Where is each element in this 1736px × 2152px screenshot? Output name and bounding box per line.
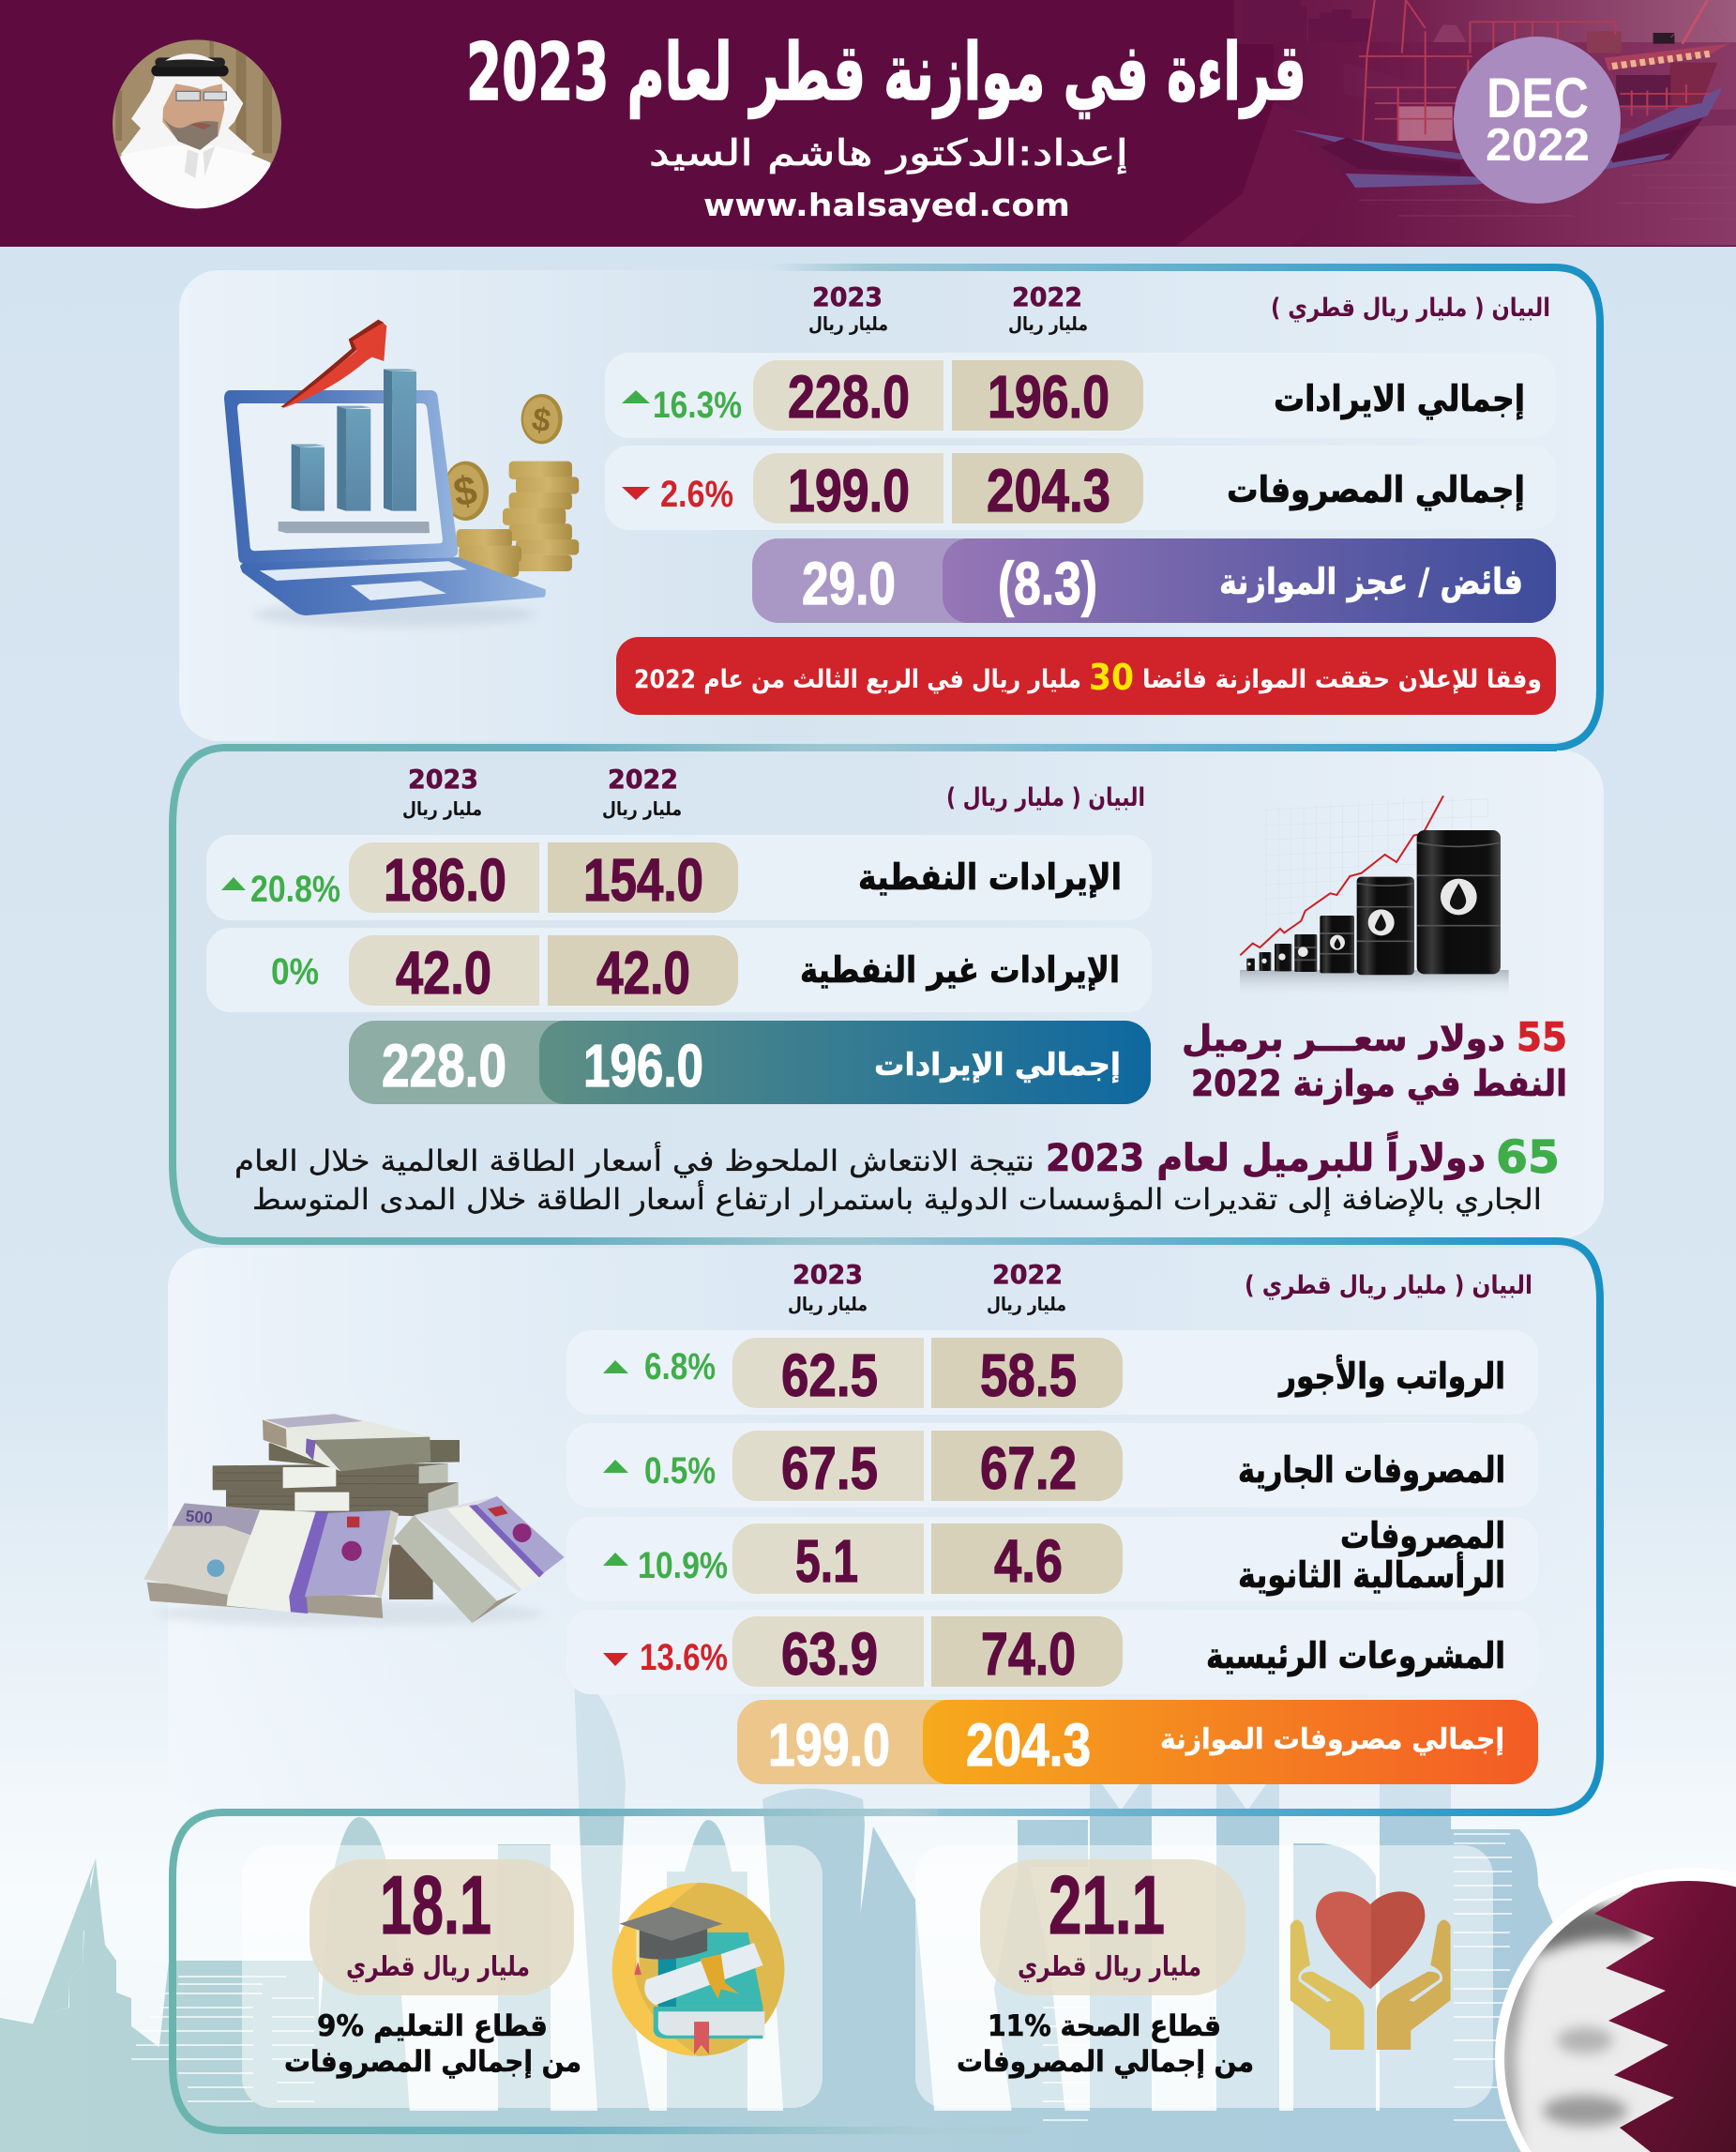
row: total budget expenditure bar: إجمالي مصروفات الموازنة [1160, 1723, 1504, 1756]
column headers: مليار ريال [987, 1293, 1066, 1315]
callout: Q3 surplus note: وفقا للإعلان حققت الموازنة فائضا [1142, 665, 1542, 694]
column headers: 2022 [608, 764, 678, 795]
row: major projects: 63.9 [781, 1620, 878, 1688]
health amount pill: مليار ريال قطري [1018, 1950, 1201, 1982]
panel 2: revenues [172, 748, 1604, 1241]
row: non-oil revenue: 42.0 [596, 939, 690, 1007]
row: total budget expenditure bar: 199.0 [768, 1711, 890, 1779]
row: oil revenue: الإيرادات النفطية [858, 856, 1122, 898]
column headers: مليار ريال [1008, 312, 1088, 335]
row: salaries and wages: 6.8% [644, 1346, 716, 1387]
row: salaries and wages [566, 1330, 1538, 1415]
row: non-oil revenue: الإيرادات غير النفطية [800, 949, 1120, 991]
title: قراءة في موازنة قطر لعام 2023 [466, 26, 1306, 119]
column headers: البيان ( مليار ريال قطري ) [1245, 1271, 1532, 1300]
Qatar flag emblem [1491, 1867, 1736, 2152]
row: surplus or deficit bar: 29.0 [802, 550, 896, 617]
row: surplus or deficit bar [752, 538, 1556, 623]
note: 2022 oil price [1182, 1014, 1567, 1104]
row: total revenue: 196.0 [988, 363, 1110, 431]
row: secondary capital expenditure: 4.6 [994, 1527, 1063, 1595]
icon: hands holding heart [1291, 1891, 1451, 2050]
row: surplus or deficit bar: (8.3) [998, 550, 1097, 617]
education amount pill [309, 1858, 574, 1995]
row: current expenditure: المصروفات الجارية [1238, 1449, 1505, 1492]
row: total revenue: إجمالي الايرادات [1274, 378, 1525, 420]
row: total revenue bar: إجمالي الإيرادات [874, 1046, 1121, 1084]
column headers: 2023 [408, 764, 478, 795]
row: major projects: 13.6% [640, 1637, 728, 1678]
education amount pill: مليار ريال قطري [346, 1950, 530, 1982]
row: salaries and wages: الرواتب والأجور [1277, 1354, 1505, 1398]
health amount pill [980, 1858, 1245, 1995]
portrait photo [110, 38, 284, 213]
panel 3: expenditures [143, 1241, 1600, 1812]
row: major projects [566, 1610, 1538, 1694]
icon: laptop with rising chart and coins [224, 320, 579, 627]
row: total expenditure: 204.3 [987, 457, 1110, 524]
icon: oil barrels and rising price line [1240, 796, 1509, 998]
row: major projects: 74.0 [981, 1620, 1076, 1688]
row: secondary capital expenditure: 5.1 [795, 1527, 858, 1595]
column headers: مليار ريال [788, 1293, 868, 1315]
column headers: 2022 [992, 1259, 1063, 1290]
health caption [957, 2009, 1254, 2079]
health caption: من إجمالي المصروفات [957, 2045, 1254, 2079]
subtitle: author: إعداد:الدكتور هاشم السيد [649, 132, 1128, 174]
row: total revenue bar: 196.0 [583, 1032, 703, 1099]
column headers: مليار ريال [808, 312, 888, 335]
row: salaries and wages: 62.5 [781, 1341, 878, 1409]
row: secondary capital expenditure [566, 1515, 1538, 1601]
date badge [1454, 37, 1621, 204]
column headers [788, 1259, 1532, 1315]
callout: Q3 surplus note [616, 637, 1556, 715]
icon: stacks of Qatari banknotes: 500 [185, 1507, 214, 1527]
note: 2023 oil price assumption: نتيجة الانتعاش الملحوظ في أسعار الطاقة العالمية خلال العام [234, 1142, 1034, 1178]
row: surplus or deficit bar: فائض / عجز الموازنة [1219, 561, 1523, 602]
column headers [808, 281, 1550, 335]
health caption: قطاع الصحة ‏%‏11 [988, 2009, 1221, 2043]
row: total revenue: 16.3% [653, 385, 742, 426]
icon: laptop with rising chart and coins: $ [450, 467, 480, 516]
column headers: 2023 [812, 281, 883, 312]
row: non-oil revenue: 0% [271, 951, 319, 993]
header band [0, 0, 1736, 247]
row: oil revenue: 186.0 [384, 846, 506, 914]
callout: Q3 surplus note: 30 [1089, 657, 1134, 698]
row: current expenditure [566, 1423, 1538, 1508]
icon: laptop with rising chart and coins: $ [529, 401, 553, 440]
note: 2023 oil price assumption: دولاراً للبرميل لعام 2023 [1046, 1130, 1486, 1180]
card: health [915, 1845, 1493, 2108]
column headers: مليار ريال [402, 797, 482, 820]
date badge: 2022 [1486, 120, 1590, 171]
card: education [242, 1845, 823, 2108]
column headers: البيان ( مليار ريال قطري ) [1271, 294, 1550, 323]
row: total expenditure: إجمالي المصروفات [1227, 469, 1525, 511]
note: 2022 oil price: دولار سعـــر برميل [1182, 1018, 1505, 1060]
row: salaries and wages: 58.5 [980, 1341, 1077, 1409]
education caption: من إجمالي المصروفات [284, 2045, 581, 2079]
row: oil revenue: 154.0 [583, 846, 703, 914]
header photo: dhow boat on water [1176, 0, 1736, 246]
education caption [284, 2009, 581, 2079]
panel 4: education and health sectors [173, 1812, 1493, 2130]
icon: stacks of Qatari banknotes [143, 1414, 565, 1626]
note: 2023 oil price assumption: الجاري بالإضافة إلى تقديرات المؤسسات الدولية باستمرار ارتفاع أسعار الطاقة خلال المدى المتوسط [252, 1180, 1542, 1217]
note: 2023 oil price assumption [234, 1130, 1560, 1217]
website: www.halsayed.com [703, 187, 1070, 223]
background: skyline window stripes [131, 1834, 1512, 2120]
note: 2022 oil price: 55 [1517, 1014, 1567, 1060]
column headers: مليار ريال [602, 797, 682, 820]
row: secondary capital expenditure: الرأسمالية الثانوية [1238, 1552, 1505, 1596]
icon: graduation cap and books [612, 1883, 784, 2056]
education caption: قطاع التعليم ‏%‏9 [317, 2009, 548, 2043]
background: Doha skyline silhouette [0, 1674, 1736, 2152]
column headers: البيان ( مليار ريال ) [946, 783, 1145, 812]
callout: Q3 surplus note: مليار ريال في الربع الثالث من عام 2022 [634, 665, 1081, 694]
row: oil revenue [206, 835, 1152, 920]
note: 2023 oil price assumption: 65 [1496, 1131, 1560, 1184]
note: 2022 oil price: النفط في موازنة 2022 [1191, 1063, 1567, 1104]
column headers: 2023 [793, 1259, 863, 1290]
column headers: 2022 [1012, 281, 1082, 312]
row: current expenditure: 67.2 [980, 1434, 1077, 1502]
row: secondary capital expenditure: المصروفات [1340, 1515, 1505, 1557]
row: total expenditure: 199.0 [788, 457, 910, 524]
row: major projects: المشروعات الرئيسية [1206, 1635, 1505, 1677]
row: total expenditure [605, 446, 1556, 530]
education amount pill: 18.1 [380, 1858, 491, 1951]
row: non-oil revenue: 42.0 [396, 939, 491, 1007]
column headers [402, 764, 1145, 820]
row: total budget expenditure bar [737, 1700, 1538, 1784]
row: secondary capital expenditure: 10.9% [638, 1545, 728, 1586]
row: current expenditure: 67.5 [781, 1434, 878, 1502]
row: total revenue [605, 353, 1556, 438]
row: total revenue bar: 228.0 [382, 1032, 506, 1099]
row: current expenditure: 0.5% [644, 1450, 716, 1492]
row: non-oil revenue [206, 928, 1152, 1012]
health amount pill: 21.1 [1049, 1858, 1165, 1951]
row: total revenue bar [349, 1021, 1151, 1104]
panel 1: budget summary [179, 267, 1600, 748]
row: total budget expenditure bar: 204.3 [966, 1711, 1091, 1779]
row: total expenditure: 2.6% [660, 474, 733, 515]
date badge: DEC [1487, 67, 1589, 129]
row: oil revenue: 20.8% [250, 869, 340, 910]
row: total revenue: 228.0 [788, 363, 910, 431]
